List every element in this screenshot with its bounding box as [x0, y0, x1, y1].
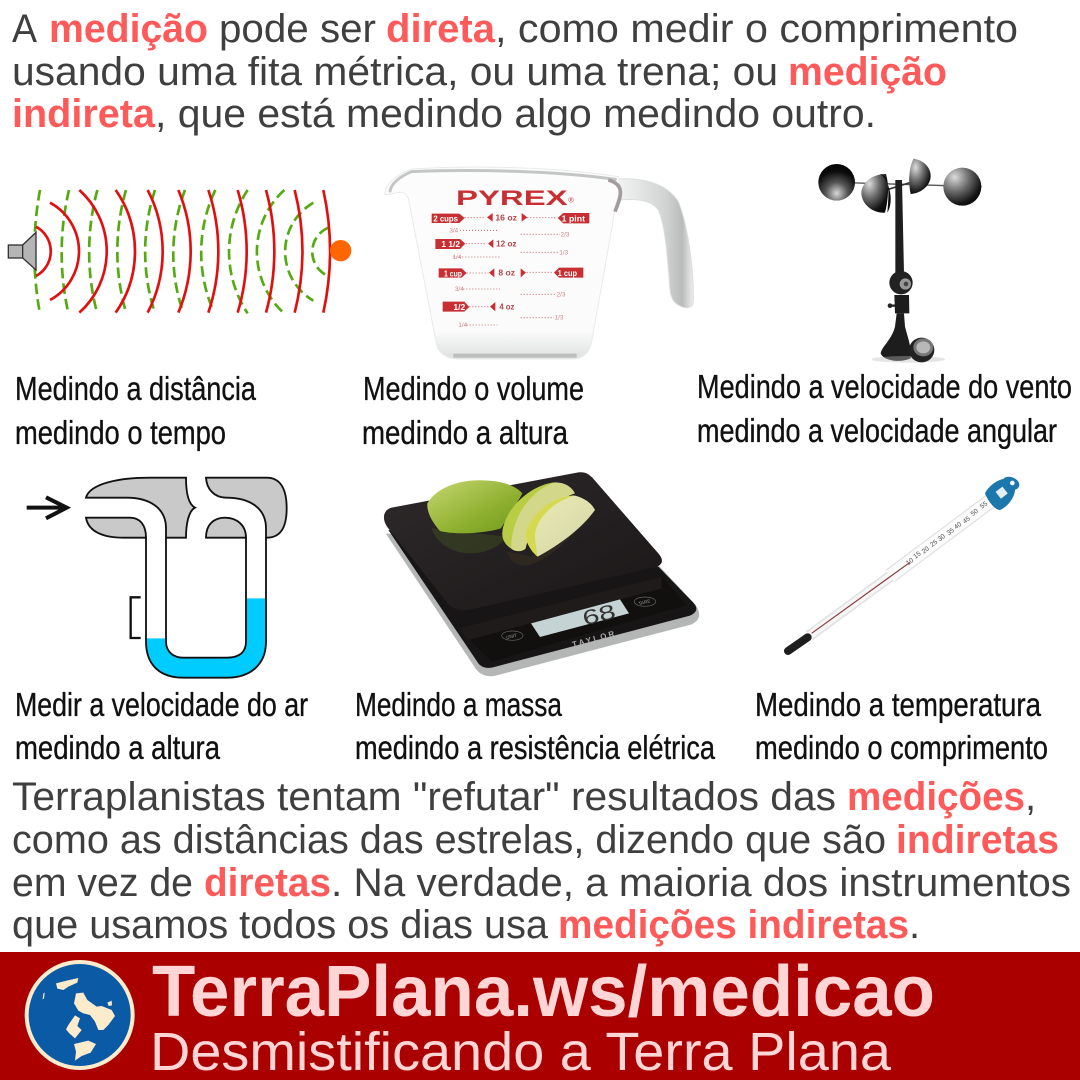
caption: volume: Medindo o volume	[363, 370, 584, 407]
photo: kitchen scale	[384, 472, 699, 676]
scale marks: 25	[929, 539, 939, 549]
scale markings: 1 pint	[562, 213, 585, 223]
red outgoing waves	[36, 190, 330, 313]
apple reflection	[432, 528, 507, 553]
intro paragraph: A	[12, 7, 37, 51]
shadow	[872, 356, 945, 363]
closing paragraph: medições indiretas	[558, 903, 909, 947]
scale marks: 50	[970, 508, 980, 518]
dotted graduations	[453, 218, 560, 325]
green dashed reflected waves	[34, 190, 328, 313]
caption: ar	[15, 686, 308, 766]
intro paragraph: , que está medindo algo medindo outro.	[155, 92, 876, 136]
stand and base	[894, 295, 909, 313]
mast	[895, 180, 904, 273]
caption: distância	[15, 370, 257, 451]
front glossy strip	[458, 577, 687, 662]
caption: distância: medindo o tempo	[15, 414, 226, 451]
rim shading	[390, 171, 617, 192]
photo: Pyrex measuring cup: ®	[568, 195, 574, 204]
scale markings: 2 cups	[433, 214, 458, 224]
gray tube housing	[86, 478, 287, 538]
caption: temperatura	[755, 686, 1048, 766]
photo: kitchen scale: TARE	[638, 598, 651, 606]
photo: Pyrex measuring cup	[385, 167, 693, 359]
photo: kitchen scale: UNIT	[506, 633, 518, 640]
glass body	[385, 167, 622, 359]
scale markings: 1 cup	[444, 268, 462, 278]
footer banner	[0, 952, 1080, 1080]
scale marks: 10	[905, 557, 915, 567]
photo: Pyrex measuring cup: 2/3	[561, 232, 570, 239]
caption: massa: Medindo a massa	[355, 686, 563, 723]
closing paragraph: .	[909, 903, 920, 947]
caption: massa	[355, 686, 716, 766]
cups	[818, 164, 855, 201]
scale markings: 1 1/2	[441, 239, 460, 249]
PYREX logo: PYREX	[456, 186, 569, 210]
green apple half	[427, 480, 522, 533]
intro paragraph: direta	[386, 7, 496, 51]
diagram: Pitot tube	[27, 478, 287, 678]
scale marks: 45	[962, 515, 972, 525]
photo: thermometer	[788, 477, 1019, 651]
site URL: TerraPlana.ws/medicao	[152, 952, 935, 1032]
icon: flat earth globe	[25, 960, 135, 1070]
intro paragraph: , como medir o comprimento	[495, 7, 1018, 51]
scale markings: 12 oz	[496, 239, 517, 249]
diagram: sound waves	[8, 190, 351, 313]
closing paragraph: Terraplanistas tentam "refutar" resultados das	[12, 775, 836, 819]
weighing plate	[384, 472, 662, 610]
handle	[618, 179, 693, 308]
scale marks: 35	[946, 527, 956, 537]
blue cap	[985, 477, 1019, 510]
scale marks	[905, 500, 989, 567]
closing paragraph: como as distâncias das estrelas, dizendo que são	[12, 818, 886, 862]
orange target dot	[330, 240, 351, 261]
scale marks: 20	[921, 545, 931, 555]
intro paragraph: usando uma fita métrica, ou uma trena; ou	[12, 50, 778, 94]
dial housing	[889, 271, 913, 294]
silver base	[386, 533, 699, 676]
scale marks: 55	[979, 500, 989, 510]
photo: Pyrex measuring cup: 1/3	[555, 315, 564, 322]
intro paragraph: indireta	[12, 92, 156, 136]
caption: volume: medindo a altura	[362, 414, 569, 451]
closing paragraph: . Na verdade, a maioria dos instrumentos	[331, 861, 1071, 905]
height bracket	[131, 597, 141, 638]
photo: Pyrex measuring cup: 1/3	[559, 249, 569, 256]
scale markings: 1 cup	[558, 268, 577, 278]
caption: ar: medindo a altura	[15, 729, 221, 766]
closing paragraph: diretas	[204, 861, 331, 905]
caption: vento	[697, 368, 1072, 449]
caption: ar: Medir a velocidade do ar	[15, 686, 308, 723]
caption: massa: medindo a resistência elétrica	[355, 729, 716, 766]
photo: Pyrex measuring cup: 3/4	[449, 227, 459, 234]
photo: Pyrex measuring cup: 3/4	[455, 286, 464, 293]
closing paragraph: em vez de	[12, 861, 193, 905]
intro paragraph: pode ser	[219, 7, 376, 51]
scale marks: 40	[953, 521, 963, 531]
closing paragraph: indiretas	[896, 818, 1059, 862]
brand and buttons: TAYLOR	[571, 629, 616, 649]
small dial	[909, 338, 934, 362]
black base top	[388, 530, 696, 668]
closing paragraph: ,	[1025, 775, 1036, 819]
apple slices	[502, 482, 575, 551]
bulb	[788, 637, 808, 651]
scale marks: 30	[937, 533, 947, 543]
mercury column	[812, 562, 910, 633]
scale markings: 1/2	[453, 302, 466, 312]
photo: kitchen scale: 68	[580, 600, 618, 631]
closing paragraph	[12, 775, 1071, 947]
airflow arrow	[27, 497, 67, 518]
speaker	[8, 232, 36, 270]
U tube outline	[146, 538, 266, 678]
scale marks: 15	[912, 550, 923, 560]
scale markings: 4 oz	[499, 302, 514, 311]
photo: Pyrex measuring cup: 1/4	[458, 322, 468, 329]
blue liquid	[146, 598, 266, 678]
intro paragraph	[12, 7, 1018, 136]
glass tube	[809, 567, 903, 636]
intro paragraph: medição	[49, 7, 208, 51]
photo: cup anemometer	[818, 159, 982, 363]
caption: volume	[362, 370, 584, 451]
photo: Pyrex measuring cup: 1/4	[453, 254, 462, 261]
arm	[823, 182, 982, 187]
scale markings: 8 oz	[498, 269, 515, 278]
LCD display	[531, 599, 629, 637]
closing paragraph: que usamos todos os dias usa	[12, 903, 549, 947]
scale markings	[432, 212, 589, 312]
scale markings: 16 oz	[495, 212, 517, 222]
closing paragraph: medições	[847, 775, 1025, 819]
intro paragraph: medição	[788, 50, 947, 94]
caption: distância: Medindo a distância	[15, 370, 257, 407]
photo: Pyrex measuring cup: 2/3	[557, 291, 566, 298]
